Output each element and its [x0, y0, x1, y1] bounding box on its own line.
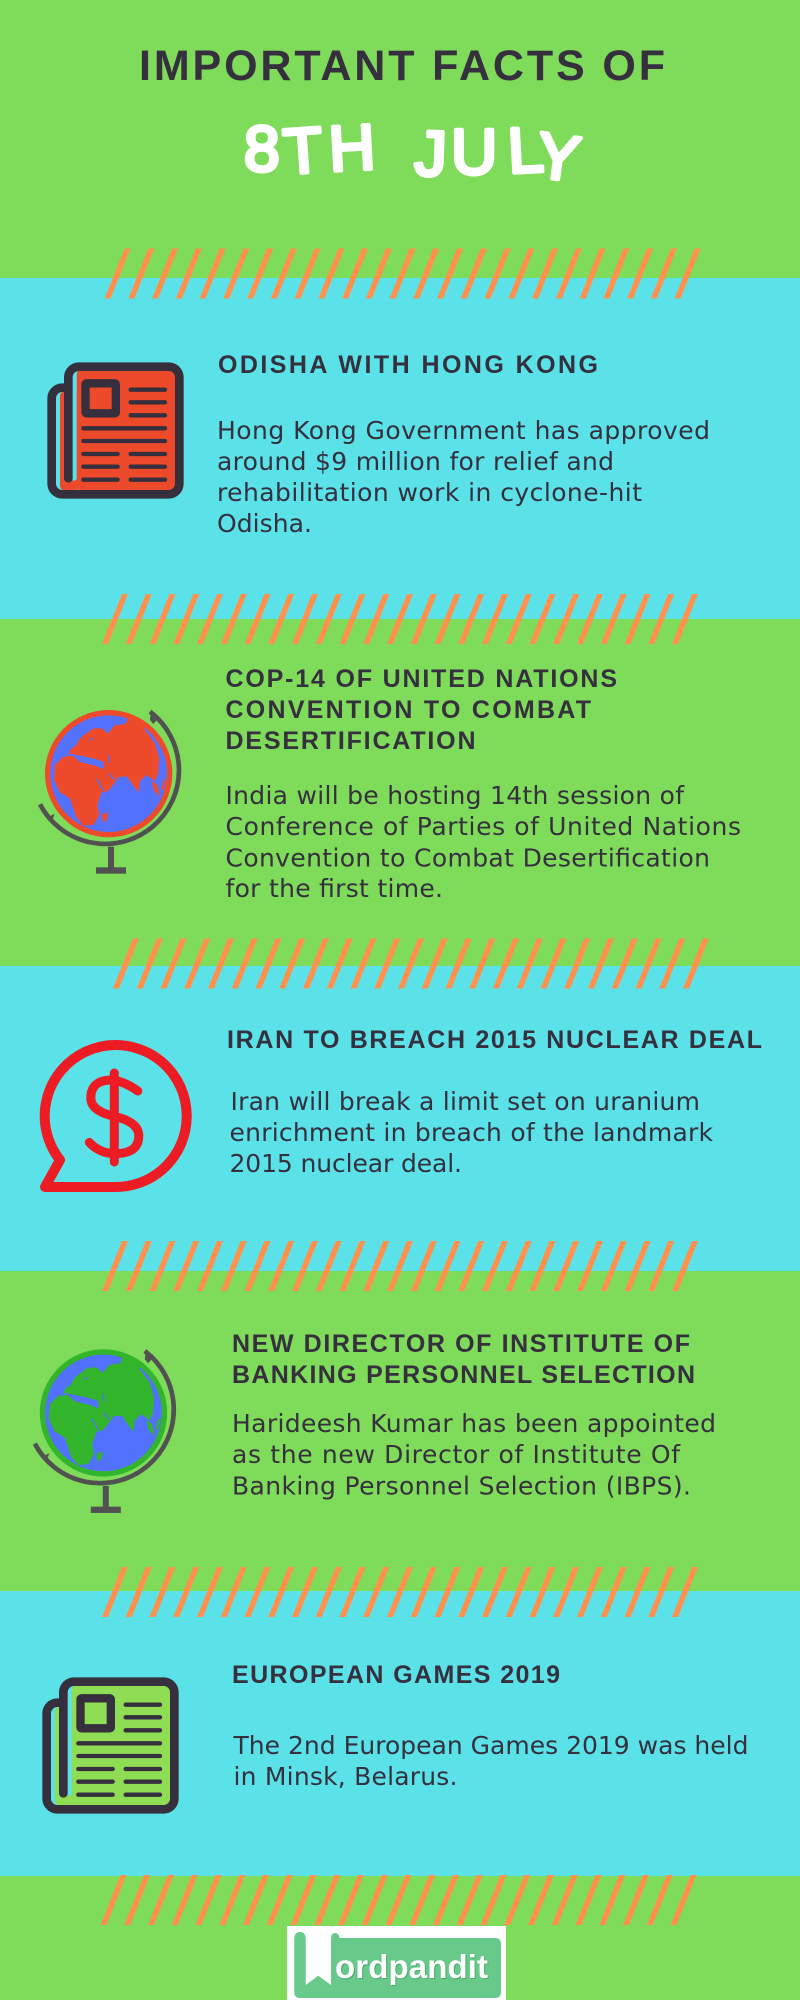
- panel: IBPS director: [0, 1271, 800, 1591]
- icon: red newspaper: [52, 367, 179, 494]
- body text: [226, 781, 741, 903]
- body text: Odisha.: [217, 509, 312, 538]
- panel: Iran nuclear deal: [0, 966, 800, 1271]
- body text: rehabilitation work in cyclone-hit: [217, 478, 642, 507]
- body text: Hong Kong Government has approved: [217, 416, 710, 445]
- panel: header: [0, 0, 800, 279]
- heading: BANKING PERSONNEL SELECTION: [232, 1361, 695, 1389]
- heading: COP-14 OF UNITED NATIONS: [226, 665, 617, 693]
- heading: EUROPEAN GAMES 2019: [232, 1661, 560, 1689]
- panel: footer: [0, 1876, 800, 2000]
- body text: [232, 1731, 748, 1791]
- icon: red globe: [40, 710, 179, 874]
- logo: Wordpandit: [287, 1926, 506, 2000]
- body text: [217, 416, 710, 538]
- body text: Iran will break a limit set on uranium: [230, 1087, 700, 1116]
- body text: Harideesh Kumar has been appointed: [232, 1409, 716, 1438]
- body text: [230, 1087, 714, 1178]
- heading: NEW DIRECTOR OF INSTITUTE OF: [232, 1330, 690, 1358]
- body text: Convention to Combat Desertification: [226, 844, 710, 872]
- heading: DESERTIFICATION: [226, 727, 476, 755]
- heading: IRAN TO BREACH 2015 NUCLEAR DEAL: [227, 1026, 762, 1054]
- heading: [226, 665, 617, 755]
- body text: as the new Director of Institute Of: [232, 1440, 681, 1469]
- title: IMPORTANT FACTS OF: [139, 42, 665, 90]
- body text: 2015 nuclear deal.: [230, 1149, 462, 1178]
- panel: European Games: [0, 1591, 800, 1877]
- panel: COP-14: [0, 619, 800, 967]
- body text: [232, 1409, 716, 1500]
- body text: for the first time.: [226, 874, 443, 903]
- icon: green newspaper: [47, 1682, 174, 1809]
- body text: The 2nd European Games 2019 was held: [232, 1731, 748, 1760]
- heading: CONVENTION TO COMBAT: [226, 696, 591, 724]
- date heading: 8TH JULY: [244, 111, 584, 196]
- body text: Banking Personnel Selection (IBPS).: [232, 1472, 691, 1500]
- icon: green globe: [35, 1349, 174, 1513]
- body text: around $9 million for relief and: [217, 447, 614, 476]
- body text: India will be hosting 14th session of: [226, 781, 685, 810]
- body text: enrichment in breach of the landmark: [230, 1118, 714, 1147]
- heading: [232, 1330, 695, 1389]
- body text: Conference of Parties of United Nations: [226, 812, 741, 841]
- heading: ODISHA WITH HONG KONG: [218, 351, 598, 379]
- panel: Odisha with Hong Kong: [0, 278, 800, 620]
- body text: in Minsk, Belarus.: [234, 1762, 458, 1791]
- logo wordmark: ordpandit: [335, 1948, 488, 1985]
- icon: dollar speech bubble: [45, 1045, 187, 1187]
